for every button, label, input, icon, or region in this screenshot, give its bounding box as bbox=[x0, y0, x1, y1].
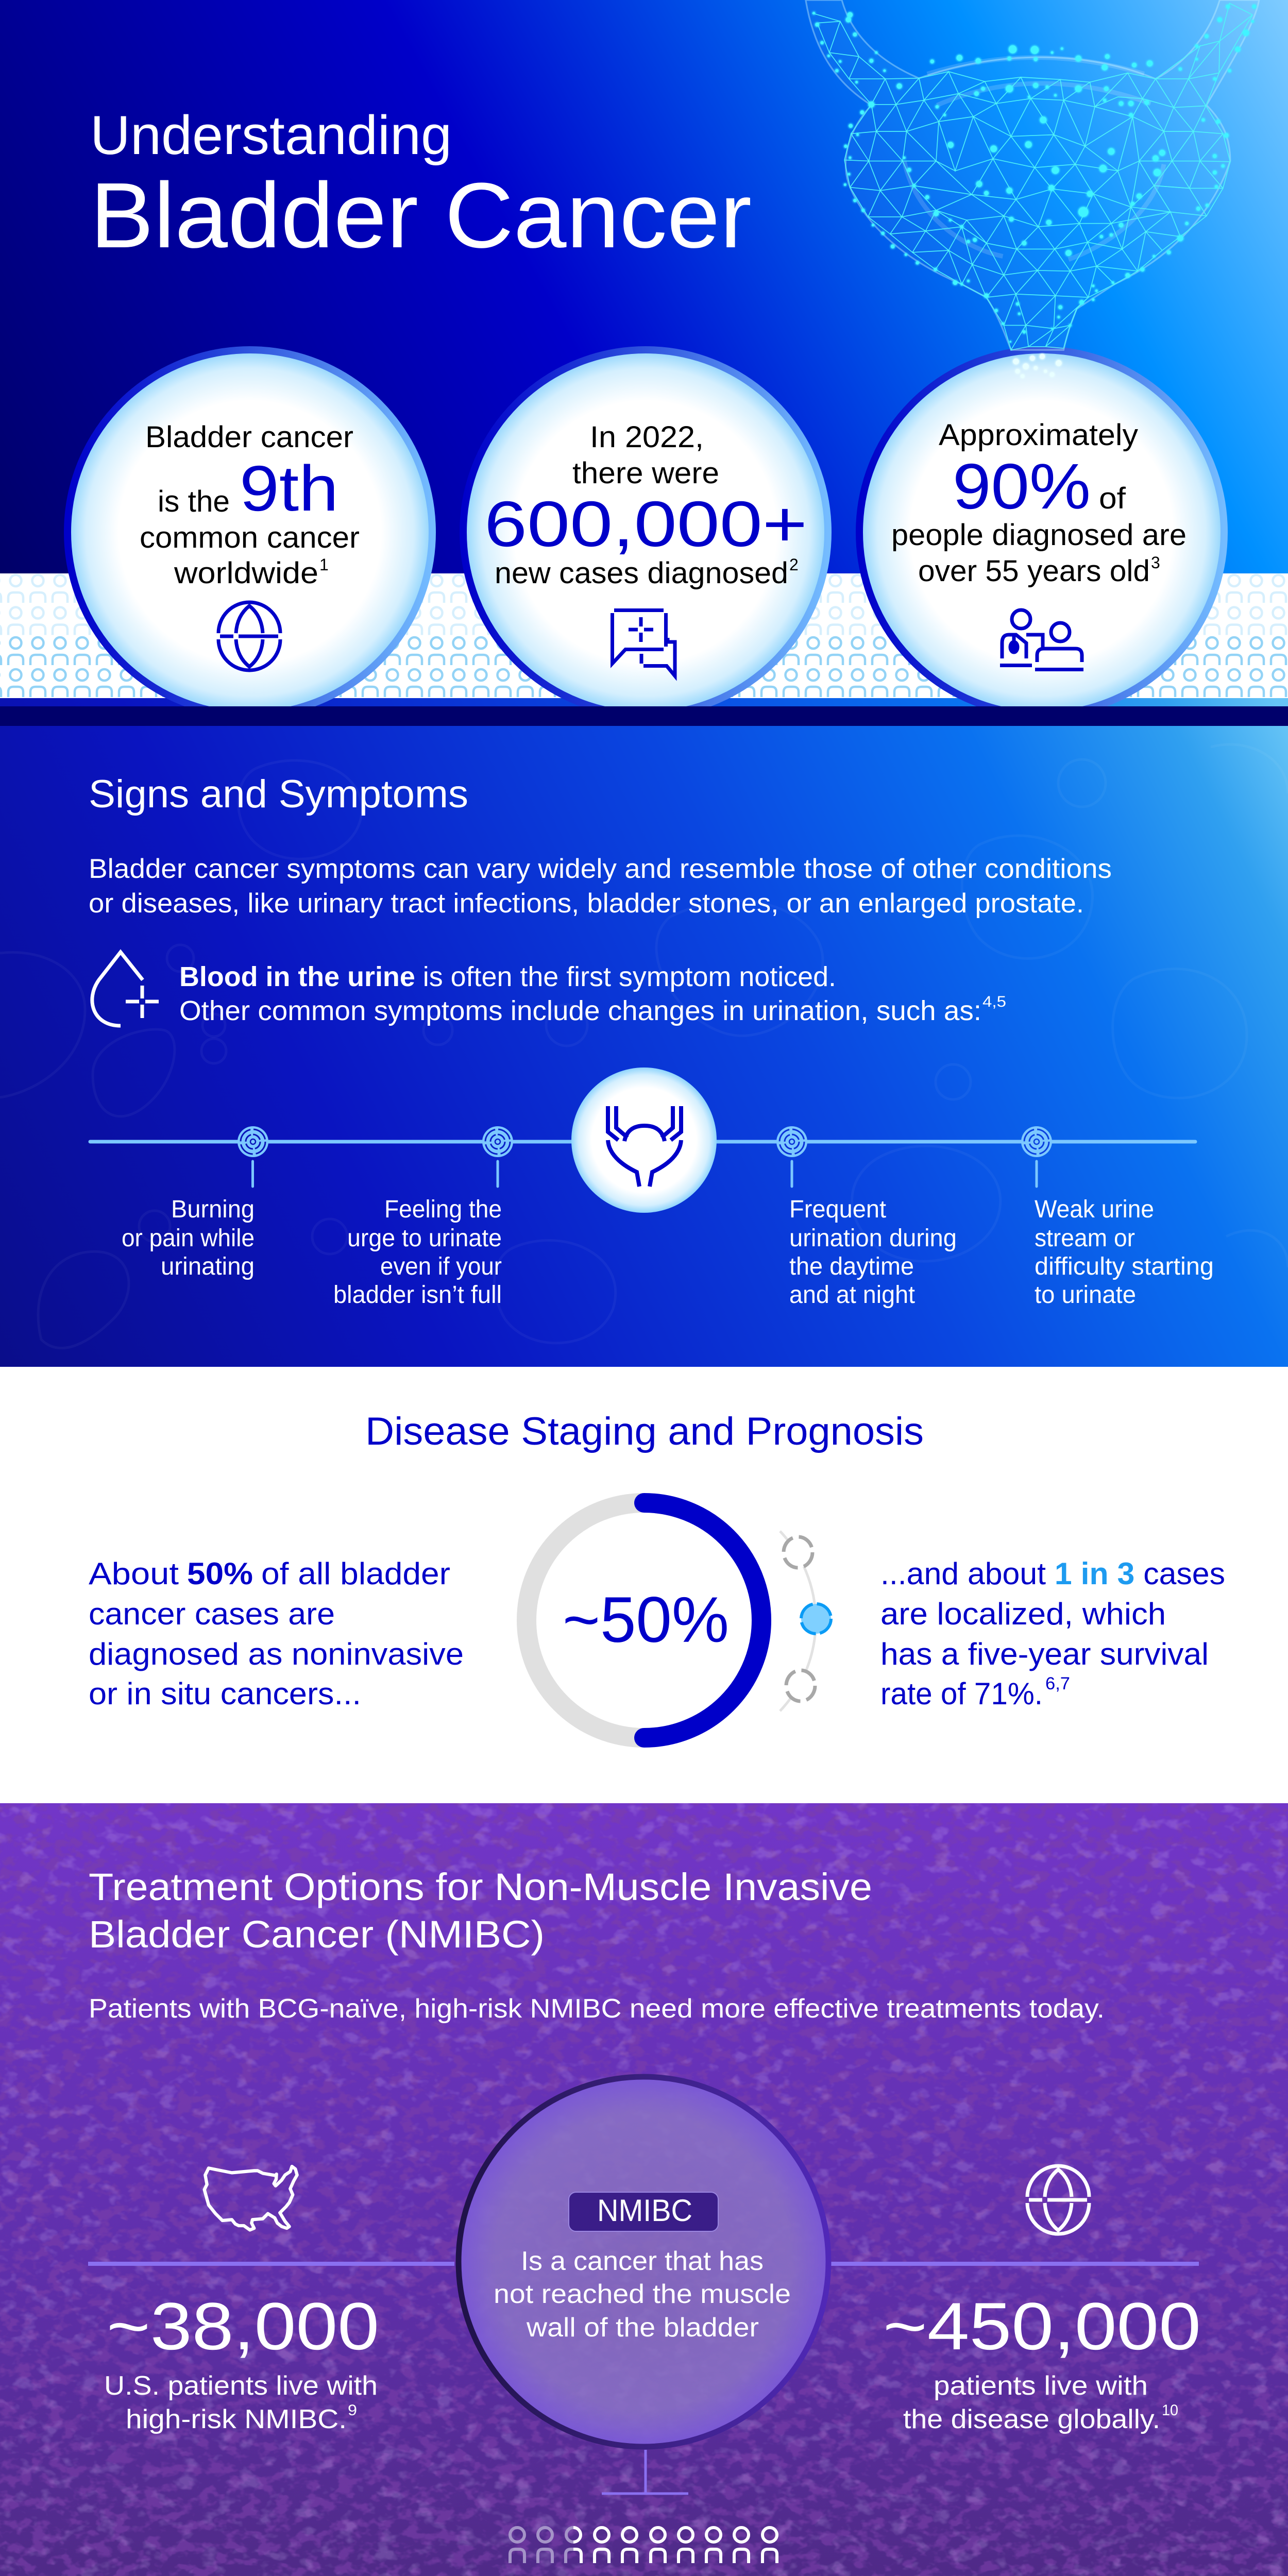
stat bubble: 9th most common: worldwide bbox=[174, 556, 318, 590]
donut chart: ~50%: ~50% bbox=[563, 1584, 729, 1656]
stat: global patients: patients live with bbox=[934, 2371, 1148, 2401]
icon: US map bbox=[205, 2166, 297, 2230]
symptom label: urgency: bladder isn’t full bbox=[333, 1281, 502, 1309]
stat bubble: 600,000+ new cases: new cases diagnosed bbox=[495, 556, 788, 590]
heading: treatment options: Bladder Cancer (NMIBC) bbox=[89, 1913, 545, 1956]
symptom label: burning: Burning bbox=[171, 1196, 255, 1223]
left statement: cancer cases are bbox=[89, 1597, 335, 1631]
right statement: ...and about 1 in 3 cases bbox=[880, 1556, 1225, 1591]
symptom label: burning: urinating bbox=[161, 1253, 255, 1280]
heading: treatment options: Treatment Options for Non-Muscle Invasive bbox=[89, 1866, 872, 1908]
patients subheading: Patients with BCG-naïve, high-risk NMIBC need more effective treatments today. bbox=[89, 1994, 1105, 2024]
donut chart: ~50% bbox=[527, 1503, 761, 1738]
symptom label: frequent urination: Frequent bbox=[789, 1196, 886, 1223]
purple tissue background bbox=[0, 1803, 1288, 2576]
blood in the urine text: Other common symptoms include changes in urination, such as: bbox=[179, 995, 981, 1026]
timeline node 4 bbox=[1021, 1126, 1052, 1187]
right statement: 6,7 bbox=[1045, 1674, 1070, 1693]
center bladder badge bbox=[571, 1067, 717, 1213]
hero section bbox=[0, 0, 1288, 726]
icon: blood drop with plus bbox=[92, 952, 159, 1026]
navy divider band bbox=[0, 706, 1288, 726]
stat bubble: 600,000+ new cases: 600,000+ bbox=[484, 488, 807, 560]
icon: globe bbox=[1027, 2166, 1089, 2234]
stat bubble: 90% over 55: over 55 years old bbox=[918, 554, 1150, 588]
stat: global patients: the disease globally. bbox=[903, 2404, 1160, 2434]
NMIBC definition text: Is a cancer that has bbox=[521, 2246, 764, 2276]
symptom timeline bbox=[90, 1067, 1195, 1213]
NMIBC definition text: not reached the muscle bbox=[494, 2279, 791, 2309]
symptom label: burning bbox=[122, 1196, 255, 1280]
stat: US patients: 9 bbox=[348, 2402, 357, 2419]
heading: treatment options bbox=[89, 1866, 872, 1956]
section: disease staging and prognosis bbox=[0, 1367, 1288, 1803]
heading: signs and symptoms: Signs and Symptoms bbox=[89, 772, 468, 816]
blood in the urine text: 4,5 bbox=[982, 993, 1006, 1010]
section: signs and symptoms bbox=[0, 726, 1288, 1367]
intro paragraph bbox=[89, 854, 1112, 919]
left statement: of all bladder bbox=[261, 1556, 450, 1591]
symptom label: urgency: Feeling the bbox=[384, 1196, 502, 1223]
pictogram: 75 percent of people bbox=[510, 2528, 777, 2563]
stat: global patients bbox=[883, 2289, 1201, 2434]
stat bubble: 90% over 55 bbox=[859, 350, 1224, 715]
stat: US patients: high-risk NMIBC. bbox=[126, 2404, 347, 2434]
blood in the urine text bbox=[179, 961, 1006, 1026]
blood in the urine text: Blood in the urine is often the first symptom noticed. bbox=[179, 961, 836, 992]
stat bubble: 90% over 55: 3 bbox=[1151, 553, 1160, 572]
timeline node 1 bbox=[238, 1126, 268, 1187]
icon: doctor and patient bbox=[1000, 610, 1083, 670]
stat bubble: 9th most common: common cancer bbox=[140, 521, 360, 554]
stat bubble: 90% over 55: of bbox=[1099, 482, 1126, 515]
title: Bladder Cancer bbox=[90, 164, 752, 267]
symptom label: weak stream: Weak urine bbox=[1035, 1196, 1154, 1223]
stat: global patients: ~450,000 bbox=[883, 2289, 1201, 2364]
stat bubble: 9th most common bbox=[67, 350, 432, 715]
stat bubble: 90% over 55: Approximately bbox=[939, 418, 1138, 452]
right statement: are localized, which bbox=[880, 1597, 1166, 1631]
heading: disease staging: Disease Staging and Prognosis bbox=[365, 1410, 924, 1453]
symptom label: weak stream: stream or bbox=[1035, 1225, 1135, 1252]
NMIBC definition text: wall of the bladder bbox=[526, 2313, 759, 2343]
connector from circle to people bbox=[602, 2450, 688, 2494]
faint cell outlines texture bbox=[0, 744, 1288, 1348]
NMIBC definition text bbox=[494, 2246, 791, 2343]
symptom label: urgency: even if your bbox=[380, 1253, 502, 1280]
symptom label: frequent urination bbox=[789, 1196, 957, 1309]
symptom label: weak stream: to urinate bbox=[1035, 1281, 1136, 1309]
title: Understanding bbox=[90, 104, 452, 166]
icon: chat bubbles with plus bbox=[612, 610, 675, 676]
stat bubble: 600,000+ new cases bbox=[463, 350, 828, 715]
white background bbox=[0, 1367, 1288, 1803]
binary pattern band bbox=[0, 573, 1288, 706]
NMIBC pill label bbox=[569, 2192, 718, 2231]
left statement: 50% bbox=[187, 1556, 253, 1591]
stat: global patients: 10 bbox=[1162, 2402, 1178, 2419]
right statement: rate of 71%. bbox=[880, 1676, 1043, 1711]
stat bubble: 90% over 55: 90% bbox=[953, 451, 1091, 522]
timeline node 2 bbox=[482, 1126, 513, 1187]
stat bubble: 600,000+ new cases: 2 bbox=[789, 555, 799, 574]
symptom label: burning: or pain while bbox=[122, 1225, 255, 1252]
stat: US patients: U.S. patients live with bbox=[104, 2371, 378, 2401]
intro paragraph: Bladder cancer symptoms can vary widely and resemble those of other conditions bbox=[89, 854, 1112, 884]
left statement: diagnosed as noninvasive bbox=[89, 1637, 464, 1671]
stat bubble: 600,000+ new cases: In 2022, bbox=[590, 420, 704, 454]
stat bubble: 90% over 55: people diagnosed are bbox=[891, 518, 1187, 552]
left statement bbox=[89, 1556, 464, 1711]
symptom label: weak stream: difficulty starting bbox=[1035, 1253, 1214, 1280]
hero background gradient bbox=[0, 0, 1288, 706]
NMIBC pill label: NMIBC bbox=[597, 2193, 692, 2228]
section: NMIBC treatment options bbox=[0, 1803, 1288, 2576]
stat: US patients bbox=[104, 2289, 379, 2434]
stat bubble: 9th most common: Bladder cancer bbox=[145, 420, 353, 454]
stat bubble: 9th most common: 9th bbox=[240, 453, 338, 524]
symptom label: frequent urination: and at night bbox=[789, 1281, 915, 1309]
title bbox=[90, 104, 752, 267]
symptom label: urgency: urge to urinate bbox=[347, 1225, 502, 1252]
icon: globe bbox=[218, 602, 280, 670]
left statement: or in situ cancers... bbox=[89, 1676, 361, 1711]
horizontal lines bbox=[88, 2262, 1199, 2266]
stat: US patients: ~38,000 bbox=[107, 2289, 379, 2364]
intro paragraph: or diseases, like urinary tract infections, bladder stones, or an enlarged prostate. bbox=[89, 888, 1084, 919]
stat bubble: 600,000+ new cases: there were bbox=[572, 456, 719, 490]
polygon mesh bladder illustration bbox=[806, 0, 1259, 378]
right statement bbox=[880, 1556, 1225, 1711]
right statement: has a five-year survival bbox=[880, 1637, 1209, 1671]
one in three arc graphic bbox=[780, 1531, 831, 1711]
left statement: About bbox=[89, 1556, 179, 1591]
symptoms background bbox=[0, 726, 1288, 1367]
symptom label: frequent urination: urination during bbox=[789, 1225, 957, 1252]
symptom label: weak stream bbox=[1035, 1196, 1214, 1309]
timeline node 3 bbox=[776, 1126, 807, 1187]
symptom label: frequent urination: the daytime bbox=[789, 1253, 914, 1280]
symptom label: urgency bbox=[333, 1196, 502, 1309]
stat bubble: 9th most common: 1 bbox=[319, 555, 329, 574]
stat bubble: 9th most common: is the bbox=[158, 485, 230, 518]
NMIBC definition circle bbox=[459, 2077, 828, 2447]
